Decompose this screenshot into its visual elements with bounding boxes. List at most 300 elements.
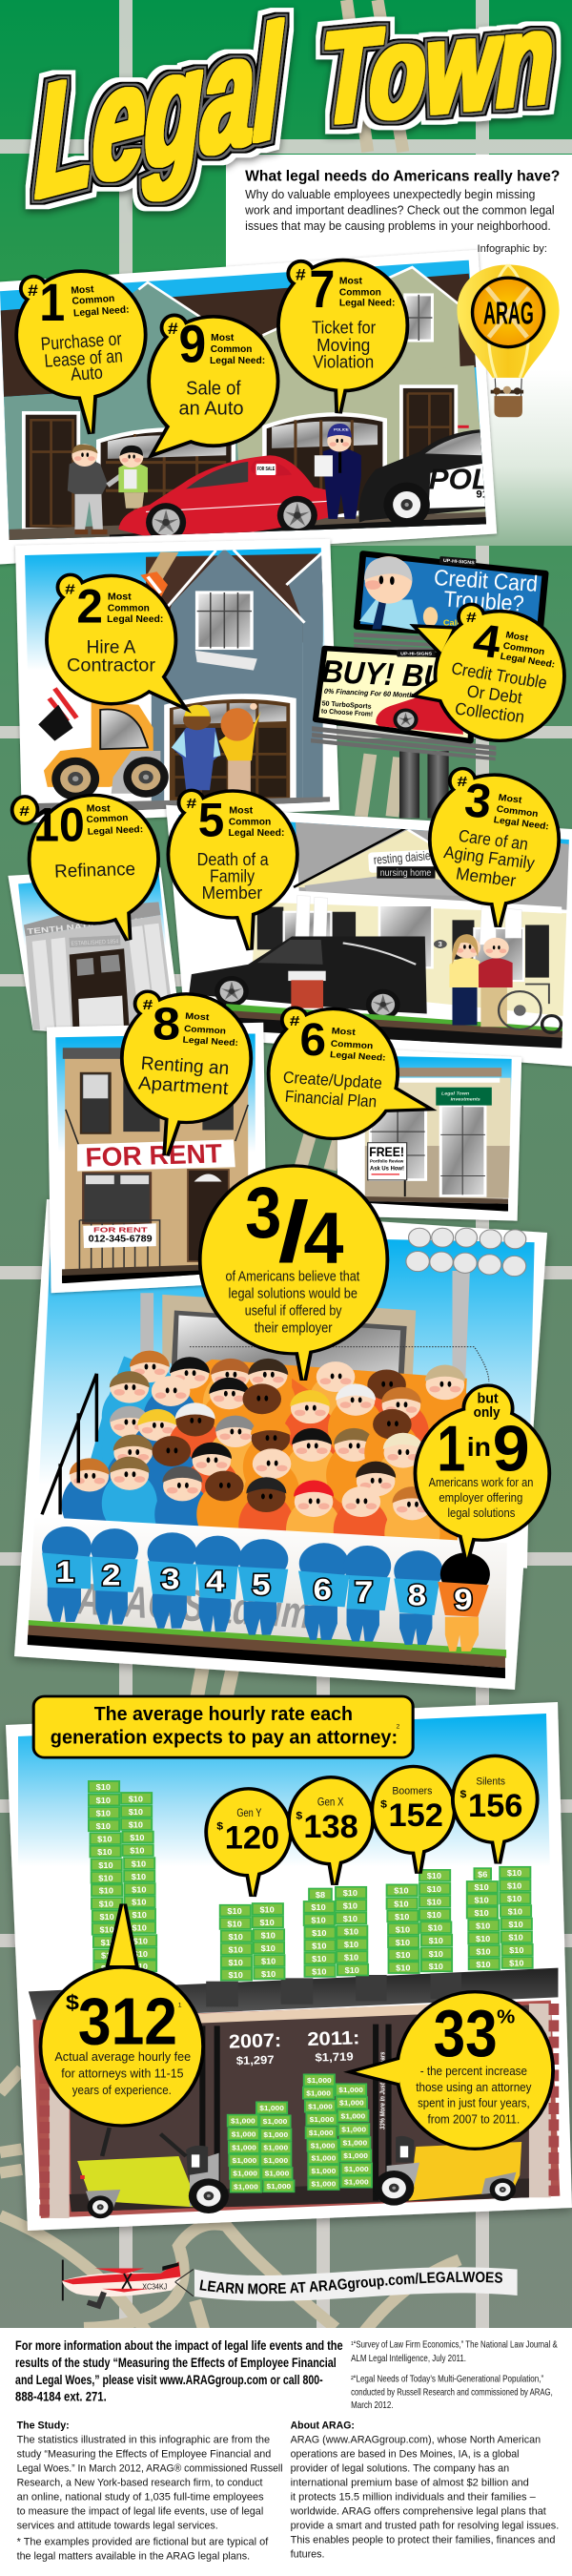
footer: about ARAG: This enables people to protect their families, finances and	[291, 2535, 555, 2546]
bubble: #10 refinance	[14, 797, 156, 940]
team of nine players: 7	[355, 1576, 373, 1610]
bubble: #5 death of a family member: Legal Need:	[229, 828, 284, 839]
panel: credit card billboards	[311, 553, 545, 819]
footer: source notes	[351, 2340, 558, 2411]
2011 spending label	[307, 2027, 360, 2064]
2007 spending label	[229, 2029, 282, 2067]
stack: silents: $10	[507, 1869, 521, 1878]
black hearse	[189, 937, 427, 1020]
bubble: #9 sale of an auto: Common	[211, 343, 252, 355]
wheelchair	[499, 984, 562, 1032]
stack: gen y: $10	[261, 1943, 276, 1953]
stack of thousand dollar bills 2007: $1,000	[234, 2183, 258, 2191]
stack: gen y: $10	[227, 1906, 242, 1916]
bubble: 3/4 statistic: 3	[245, 1173, 281, 1254]
footer: the study	[17, 2420, 283, 2562]
bubble: $312 actual fee	[42, 1904, 201, 2124]
stack of thousand dollar bills 2007: $1,000	[263, 2156, 289, 2165]
bubble: 3/4 statistic: useful if offered by	[245, 1303, 342, 1319]
right yellow forklift	[374, 2025, 521, 2206]
bubble: #2 hire a contractor: Common	[108, 604, 150, 613]
billboard: credit card trouble: UP-HI-SIGNS	[443, 558, 476, 566]
footer: about ARAG: provider of legal solutions. The company has an	[291, 2463, 509, 2475]
bubble: #2 hire a contractor: Legal Need:	[107, 614, 163, 625]
bubble: boomers: 152	[389, 1797, 443, 1834]
railing and rental sign: FOR RENT	[93, 1226, 148, 1234]
stack: silents: $10	[508, 1907, 522, 1916]
stack: gen x: $10	[343, 1889, 358, 1898]
stack: gen x: $10	[312, 1929, 327, 1938]
panel: houses, car and police scene	[0, 250, 541, 565]
stack: silents: $10	[474, 1909, 489, 1918]
bubble: #10 refinance: #	[19, 804, 30, 820]
bubble: silents: 156	[468, 1787, 522, 1823]
bubble: boomers: Boomers	[392, 1785, 433, 1797]
railing and rental sign	[79, 1220, 160, 1269]
stack: boomers: $10	[394, 1886, 409, 1896]
bubble: #6 create or update financial plan	[271, 1009, 426, 1137]
bubble: #10 refinance: Most	[87, 804, 111, 815]
woman with red hair	[219, 703, 261, 792]
bubble: 3/4 statistic: /	[278, 1184, 309, 1279]
bubble: #1 purchase or lease of an auto: Auto	[70, 363, 104, 385]
bubble: 3/4 statistic	[202, 1168, 385, 1380]
footer: for more information	[15, 2338, 343, 2404]
warehouse with forklifts	[29, 1968, 560, 2218]
footer: for more information: For more information about the impact of legal life events and the	[15, 2338, 343, 2353]
investments sign: Investments	[451, 1097, 480, 1102]
police car	[358, 426, 485, 527]
stack: boomers: $10	[429, 1949, 443, 1959]
bubble: #10 refinance: Common	[86, 813, 129, 825]
stack of thousand dollar bills 2011: $1,000	[308, 2103, 333, 2110]
footer: the study: services and attitude towards legal services.	[17, 2521, 218, 2532]
stack: actual fee: $10	[130, 1846, 145, 1856]
bubble: #3 care of an aging family member: Legal Need:	[493, 816, 549, 832]
billboard: buy buy: to Choose From!	[321, 707, 373, 718]
stack of thousand dollar bills 2007: $1,000	[265, 2170, 290, 2178]
team of nine players: 2	[102, 1559, 120, 1592]
intro text block: Infographic by:	[478, 242, 547, 255]
bubble: 33 percent increase: %	[497, 2006, 515, 2027]
bubble: #8 renting an apartment: Most	[185, 1011, 211, 1023]
bubble: #9 sale of an auto: Legal Need:	[210, 355, 265, 366]
stack: gen y: $10	[229, 1945, 243, 1954]
stack of thousand dollar bills 2011: $1,000	[310, 2115, 335, 2124]
contractor in overalls	[172, 705, 221, 790]
bubble: #4 credit trouble or debt collection: Legal Need:	[500, 652, 556, 670]
footer: the study: the legal matters available in the ARAG legal plans.	[17, 2551, 250, 2562]
bubble: #8 renting an apartment: #	[143, 998, 153, 1013]
intro text block: issues that may be causing problems in your neighborhood.	[245, 218, 551, 233]
bubble: gen x: $	[296, 1810, 303, 1821]
stack: gen x	[304, 1887, 368, 1977]
footer: source notes: ALM Legal Intelligence, July 2011.	[351, 2354, 466, 2364]
stack: boomers: $10	[427, 1898, 441, 1906]
stack: actual fee: $10	[99, 1912, 114, 1922]
stack: gen x: $10	[312, 1954, 327, 1963]
crane arm	[140, 552, 178, 598]
bubble: #6 create or update financial plan: Most	[331, 1027, 357, 1038]
team of nine players: ARAG Stadium	[75, 1575, 313, 1638]
stack: actual fee: $10	[133, 1923, 147, 1933]
stack: gen y: $10	[229, 1932, 243, 1942]
free portfolio review sign: Portfolio Review	[370, 1159, 403, 1164]
bubble: 3/4 statistic: of Americans believe that	[225, 1270, 360, 1284]
police car: POLICE	[429, 463, 541, 495]
bubble: but only 1 in 9 statistic: in	[467, 1433, 491, 1462]
stack of thousand dollar bills 2007	[228, 2102, 294, 2192]
bubble: #2 hire a contractor	[49, 576, 181, 705]
stack: gen x: $10	[311, 1903, 326, 1912]
bubble: #7 ticket for moving violation: #	[296, 266, 306, 284]
stack of thousand dollar bills 2011: $1,000	[311, 2142, 336, 2150]
investments sign: Legal Town	[441, 1091, 469, 1096]
bubble: #8 renting an apartment: 8	[153, 999, 180, 1049]
panel: tenth national bank scene: ESTABLISHED 1854	[71, 939, 119, 947]
bubble: #3 care of an aging family member: Common	[496, 804, 539, 820]
bubble: boomers: $	[380, 1798, 387, 1810]
stack: gen y: $10	[227, 1920, 242, 1928]
team of nine players: 1	[55, 1555, 74, 1589]
bubble: #5 death of a family member: Common	[229, 818, 271, 827]
stack: actual fee: $10	[97, 1835, 112, 1844]
stack: actual fee: $10	[129, 1807, 143, 1817]
stack: actual fee: $10	[132, 1898, 147, 1907]
red car for sale	[118, 455, 328, 536]
bubble: 33 percent increase	[356, 1993, 551, 2148]
footer: the study: The statistics illustrated in this infographic are from the	[17, 2435, 270, 2446]
panel: contractor scene	[15, 539, 339, 823]
bubble: #7 ticket for moving violation: Most	[339, 276, 362, 286]
bubble: #3 care of an aging family member: Care of an	[457, 827, 529, 855]
bubble: gen y	[208, 1791, 289, 1896]
stack: boomers: $10	[427, 1884, 441, 1894]
bubble: #9 sale of an auto: #	[168, 320, 178, 338]
bubble: #1 purchase or lease of an auto: 1	[39, 273, 65, 332]
stack: silents: $10	[476, 1934, 490, 1943]
2007 spending label: $1,297	[236, 2053, 275, 2067]
bubble: but only 1 in 9 statistic: but	[478, 1392, 499, 1406]
billboard: buy buy: 0% Financing For 60 Months!	[324, 687, 420, 699]
police officer with citation	[315, 424, 361, 519]
stack: boomers: $10	[396, 1963, 411, 1973]
woman caregiver	[449, 934, 480, 1026]
stack: actual fee: $10	[96, 1783, 111, 1792]
team of nine players	[28, 1517, 507, 1678]
bubble: #9 sale of an auto	[151, 314, 276, 452]
bubble: #7 ticket for moving violation: Ticket for	[312, 318, 376, 338]
intro text block: Why do valuable employees unexpectedly begin missing	[245, 187, 535, 201]
bubble: but only 1 in 9 statistic: 9	[493, 1412, 530, 1485]
footer: about ARAG: futures.	[291, 2549, 325, 2561]
bubble: #1 purchase or lease of an auto: #	[28, 281, 38, 300]
bubble: 33 percent increase: spent in just four years,	[418, 2097, 530, 2110]
bubble: #6 create or update financial plan: 6	[300, 1014, 326, 1066]
bubble: #2 hire a contractor: Contractor	[67, 655, 155, 675]
footer: the study: to measure the impact of legal life events, use of legal	[17, 2506, 263, 2518]
bubble: #7 ticket for moving violation: Violation	[313, 352, 374, 371]
stack: boomers	[387, 1870, 452, 1973]
bubble: but only 1 in 9 statistic: employer offering	[439, 1491, 522, 1505]
stack: actual fee: $10	[97, 1847, 112, 1857]
2011 spending label: 2011:	[307, 2027, 360, 2050]
stack: boomers: $10	[394, 1900, 409, 1908]
bubble: 33 percent increase: from 2007 to 2011.	[427, 2113, 520, 2127]
bubble: silents: Silents	[476, 1776, 505, 1787]
stack: boomers: $10	[429, 1962, 443, 1971]
bubble: #6 create or update financial plan: Create/Update	[282, 1068, 383, 1092]
bubble: 33 percent increase: - the percent increase	[420, 2065, 527, 2079]
footer: source notes: March 2012.	[351, 2401, 393, 2411]
stack: gen x: $10	[312, 1942, 327, 1950]
stack of thousand dollar bills 2011: $1,000	[343, 2151, 369, 2160]
right yellow forklift: 33% More In Just Four Years	[379, 2051, 387, 2129]
bubble: silents: $	[460, 1789, 467, 1800]
stack: actual fee: $10	[132, 1859, 146, 1868]
billboard: buy buy: 50 TurboSports	[321, 699, 372, 711]
stack: gen y: $10	[229, 1971, 243, 1980]
stack of thousand dollar bills 2011: $1,000	[342, 2139, 368, 2148]
bubble: gen x: Gen X	[317, 1796, 343, 1809]
icon: red biplane	[62, 2260, 194, 2306]
elderly man	[479, 938, 513, 1027]
panel: attorney fee money scene	[6, 1696, 572, 2231]
bubble: #4 credit trouble or debt collection: Credit Trouble	[450, 659, 548, 694]
footer: about ARAG: international premium base of almost $2 billion and	[291, 2478, 529, 2489]
bubble: #6 create or update financial plan: Common	[330, 1039, 374, 1051]
stack: silents: $10	[507, 1894, 521, 1903]
stack: gen y: $10	[261, 1969, 276, 1979]
free portfolio review sign: FREE!	[369, 1145, 404, 1160]
stack: silents: $10	[476, 1947, 491, 1956]
panel: for rent building scene	[47, 1023, 267, 1293]
bubble: but only 1 in 9 statistic: only	[474, 1405, 500, 1421]
intro text block: work and important deadlines? Check out the common legal	[244, 203, 555, 218]
stack of thousand dollar bills 2011: $1,000	[306, 2089, 332, 2097]
bubble: #8 renting an apartment: Common	[184, 1025, 226, 1036]
bubble: #6 create or update financial plan: Legal Need:	[330, 1050, 386, 1063]
stack: gen x: $10	[344, 1941, 358, 1949]
icon: ARAG hot air balloon	[457, 264, 560, 417]
stack: actual fee: $10	[132, 1885, 147, 1894]
billboard: buy buy: UP-HI-SIGNS	[400, 652, 433, 656]
stack: gen x: $10	[344, 1953, 358, 1963]
police officer with citation: POLICE	[334, 426, 349, 431]
stack of thousand dollar bills 2011: $1,000	[312, 2154, 337, 2163]
bubble: #7 ticket for moving violation	[280, 260, 406, 413]
stack of thousand dollar bills 2007: $1,000	[232, 2144, 256, 2151]
footer: about ARAG: provide a smart and trusted path for resolving legal issues.	[291, 2521, 559, 2532]
stack: actual fee: $10	[129, 1820, 143, 1829]
bubble: boomers	[374, 1768, 453, 1873]
bubble: #8 renting an apartment: Renting an	[140, 1053, 230, 1079]
stack: silents: $10	[508, 1920, 523, 1929]
stack of thousand dollar bills 2011: $1,000	[312, 2180, 337, 2189]
heading: average hourly rate	[33, 1696, 413, 1757]
stack: silents: $10	[474, 1883, 489, 1892]
stack of thousand dollar bills 2011	[303, 2074, 372, 2190]
stack: actual fee: $10	[129, 1795, 143, 1803]
bubble: #1 purchase or lease of an auto	[18, 273, 144, 433]
stacks of ten dollar bills	[33, 1696, 536, 1981]
bubble: but only 1 in 9 statistic: legal solutions	[448, 1506, 515, 1520]
bubble: #1 purchase or lease of an auto: Lease of an	[44, 346, 123, 372]
stack: silents: $10	[476, 1922, 490, 1930]
stack: actual fee: $10	[96, 1809, 111, 1818]
stack of thousand dollar bills 2011: $1,000	[309, 2129, 334, 2137]
bubble: #1 purchase or lease of an auto: Common	[72, 293, 115, 307]
bubble: #7 ticket for moving violation: Common	[339, 286, 381, 298]
icon: red biplane: XC34KJ	[142, 2283, 167, 2291]
bubble: #1 purchase or lease of an auto: Legal Need:	[73, 304, 130, 319]
stack: actual fee: $10	[133, 1937, 148, 1945]
bubble: 3/4 statistic: legal solutions would be	[229, 1286, 358, 1301]
person buying a car	[68, 445, 122, 534]
stack: silents: $10	[476, 1960, 491, 1969]
bubble: 33 percent increase: those using an attorney	[416, 2081, 532, 2095]
stack: actual fee: $10	[101, 1938, 115, 1947]
stack of thousand dollar bills 2011: $1,000	[344, 2178, 369, 2186]
stack: silents: $10	[509, 1945, 524, 1955]
stack: gen y: $10	[261, 1957, 276, 1965]
bubble: #8 renting an apartment: Apartment	[137, 1073, 229, 1099]
bubble: #4 credit trouble or debt collection: Common	[502, 641, 545, 657]
railing and rental sign: 012-345-6789	[89, 1234, 153, 1244]
bubble: gen x: 138	[303, 1808, 358, 1845]
bubble: #6 create or update financial plan: Financial Plan	[284, 1087, 378, 1111]
footer: about ARAG: About ARAG:	[291, 2420, 355, 2432]
footer: the study: The Study:	[17, 2420, 70, 2432]
stack: actual fee: $10	[98, 1874, 113, 1882]
bubble: #3 care of an aging family member: Member	[455, 864, 517, 891]
stack: boomers: $10	[428, 1923, 442, 1933]
billboard: credit card trouble: Trouble?	[442, 588, 524, 616]
stack: boomers: $10	[427, 1872, 441, 1880]
brick pier	[288, 971, 326, 1008]
stack of thousand dollar bills 2011: $1,000	[307, 2076, 332, 2085]
stack of thousand dollar bills 2011: $1,000	[344, 2165, 369, 2173]
bubble: #4 credit trouble or debt collection: #	[466, 611, 477, 626]
bubble: but only 1 in 9 statistic: Americans work for an	[429, 1476, 533, 1489]
stack: actual fee: $10	[96, 1796, 111, 1805]
stack: actual fee: $10	[133, 1949, 148, 1959]
bubble: #5 death of a family member: Family	[210, 867, 255, 886]
stack: actual fee: $10	[101, 1951, 115, 1960]
stack of thousand dollar bills 2007: $1,000	[231, 2117, 255, 2125]
footer: about ARAG: operations are based in Des Moines, IA, is a global	[291, 2449, 520, 2461]
panel: nursing home and hearse scene: 3	[439, 941, 442, 948]
bubble: gen x	[291, 1778, 371, 1884]
stack: actual fee: $10	[99, 1925, 114, 1934]
bubble: $312 actual fee: 1	[178, 2003, 182, 2008]
bubble: #7 ticket for moving violation: 7	[309, 260, 335, 319]
stack of thousand dollar bills 2011: $1,000	[341, 2112, 366, 2120]
footer: for more information: 888-4184 ext. 271.	[15, 2389, 107, 2404]
stack: actual fee	[89, 1781, 156, 1973]
stack of thousand dollar bills 2011: $1,000	[341, 2126, 367, 2134]
bubble: #6 create or update financial plan: #	[290, 1014, 300, 1029]
red car for sale: FOR SALE	[257, 467, 275, 472]
bubble: #10 refinance: Legal Need:	[87, 824, 143, 838]
bubble: #5 death of a family member: #	[187, 797, 196, 812]
bubble: $312 actual fee: 312	[78, 1984, 177, 2059]
stack: gen y: $10	[259, 1905, 275, 1914]
stack: gen x: $10	[312, 1967, 327, 1976]
stair railing	[42, 1374, 96, 1514]
police car: 911	[476, 489, 494, 501]
bubble: #3 care of an aging family member: Most	[498, 793, 523, 806]
bubble: gen y: Gen Y	[236, 1806, 261, 1819]
banner: learn more link: LEARN MORE AT ARAGgroup.com/LEGALWOES	[199, 2272, 502, 2294]
bubble: #9 sale of an auto: 9	[178, 314, 206, 373]
stack: gen x: $10	[343, 1914, 358, 1923]
stack of thousand dollar bills 2011: $1,000	[338, 2086, 364, 2094]
stack: actual fee: $10	[133, 1962, 148, 1971]
stack: gen x: $10	[343, 1901, 358, 1910]
stack: gen y: $10	[261, 1931, 276, 1940]
stack: silents: $10	[509, 1959, 524, 1967]
stack: silents: $10	[507, 1881, 521, 1890]
stack: silents: $10	[474, 1896, 489, 1905]
bubble: #4 credit trouble or debt collection: Collection	[454, 699, 525, 727]
stack: gen y	[220, 1903, 284, 1981]
bubble: #7 ticket for moving violation: Legal Need:	[339, 298, 395, 308]
nursing home sign	[368, 847, 439, 879]
stack: gen x: $8	[316, 1890, 325, 1900]
bubble: #2 hire a contractor: 2	[76, 580, 103, 634]
team of nine players: 6	[313, 1573, 332, 1607]
bubble: silents	[455, 1757, 536, 1863]
bubble: #9 sale of an auto: an Auto	[178, 398, 244, 420]
team of nine players: 4	[206, 1566, 225, 1599]
team of nine players: 5	[252, 1568, 271, 1602]
2007 spending label: 2007:	[229, 2029, 282, 2052]
footer: about ARAG: worldwide. ARAG offers comprehensive legal plans that	[290, 2506, 546, 2518]
stack: actual fee: $10	[98, 1860, 113, 1870]
bubble: #7 ticket for moving violation: Moving	[317, 335, 370, 355]
footer: the study: study “Measuring the Effects of Employee Financial and	[17, 2449, 271, 2461]
stack: boomers: $10	[427, 1911, 441, 1920]
team of nine players: 9	[454, 1583, 473, 1616]
stack: actual fee: $10	[132, 1872, 146, 1881]
stack: actual fee: $10	[133, 1911, 147, 1920]
footer: the study: * The examples provided are fictional but are typical of	[17, 2537, 269, 2547]
stack: boomers: $10	[396, 1951, 411, 1960]
bubble: 3/4 statistic: their employer	[255, 1321, 333, 1336]
bubble: #4 credit trouble or debt collection: Most	[504, 631, 529, 644]
free portfolio review sign	[368, 1143, 407, 1196]
bubble: gen y: $	[216, 1820, 224, 1832]
footer: about ARAG: it protects 15.5 million individuals and their families –	[291, 2492, 537, 2503]
bubble: $312 actual fee: years of experience.	[72, 2084, 172, 2098]
stack: boomers: $10	[396, 1938, 410, 1947]
stack: actual fee: $10	[130, 1833, 145, 1842]
bubble: #3 care of an aging family member: Aging Family	[442, 843, 536, 874]
stack of thousand dollar bills 2007: $1,000	[232, 2130, 256, 2138]
nursing home sign: resting daisies	[373, 847, 436, 867]
bubble: #8 renting an apartment	[124, 993, 249, 1155]
stack: actual fee: $10	[101, 1963, 115, 1973]
heading: average hourly rate: The average hourly rate each	[94, 1702, 353, 1725]
bubble: #4 credit trouble or debt collection: 4	[470, 613, 505, 668]
bubble: $312 actual fee: $	[66, 1992, 79, 2015]
stack: silents	[467, 1867, 533, 1969]
bubble: $312 actual fee: Actual average hourly fee	[54, 2050, 191, 2065]
bubble: but only 1 in 9 statistic: 1	[437, 1412, 465, 1485]
bubble: #5 death of a family member: Death of a	[197, 850, 269, 870]
bubble: #5 death of a family member: 5	[198, 794, 224, 847]
